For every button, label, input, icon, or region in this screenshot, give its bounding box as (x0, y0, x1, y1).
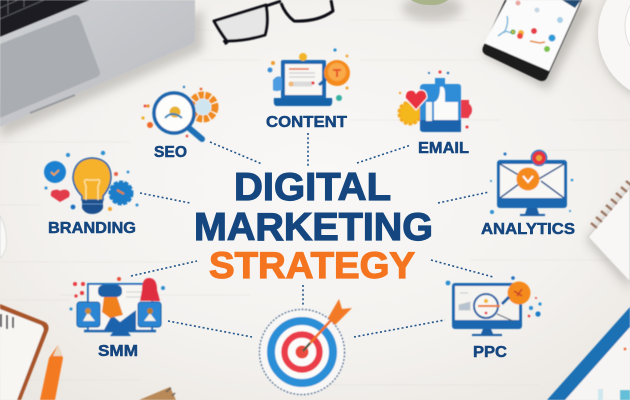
node: email (399, 70, 472, 157)
smartphone (482, 0, 592, 90)
label: CONTENT (266, 114, 347, 131)
label: EMAIL (418, 140, 469, 157)
node: SEO (141, 86, 215, 161)
node: PPC (446, 276, 542, 361)
title line: marketing: MARKETING (194, 206, 433, 249)
icon: monitor with envelope (490, 150, 573, 216)
node: analytics (481, 150, 575, 238)
clip notebook bottom (139, 387, 176, 400)
icon: monitor with magnifier (446, 276, 542, 336)
icon: thumbs up and heart (399, 70, 472, 132)
label: ANALYTICS (481, 221, 575, 238)
tablet clipboard (547, 307, 630, 400)
icon: light bulb (44, 151, 138, 214)
icon: target with arrow (260, 299, 352, 394)
spiral notepad right (586, 181, 630, 290)
node: content (266, 48, 350, 131)
eyeglasses (214, 0, 333, 43)
orange pen (40, 345, 63, 400)
label: BRANDING (48, 220, 136, 237)
icon: social monitor (70, 277, 165, 336)
coffee saucer (598, 0, 630, 103)
icon: magnifier with gear (141, 86, 215, 139)
label: PPC (473, 344, 507, 361)
title (194, 166, 433, 286)
laptop (0, 0, 203, 138)
icon: laptop with document (268, 48, 350, 106)
dotted connector lines (131, 133, 493, 337)
title line: strategy: STRATEGY (209, 245, 415, 286)
white cup left edge (0, 216, 6, 258)
label: SMM (98, 343, 138, 360)
plant pot (402, 0, 462, 21)
label: SEO (154, 144, 187, 161)
title line: digital: DIGITAL (234, 166, 391, 209)
node: SMM (70, 277, 165, 360)
node: branding (44, 151, 138, 237)
spiral notebook left (0, 304, 49, 400)
